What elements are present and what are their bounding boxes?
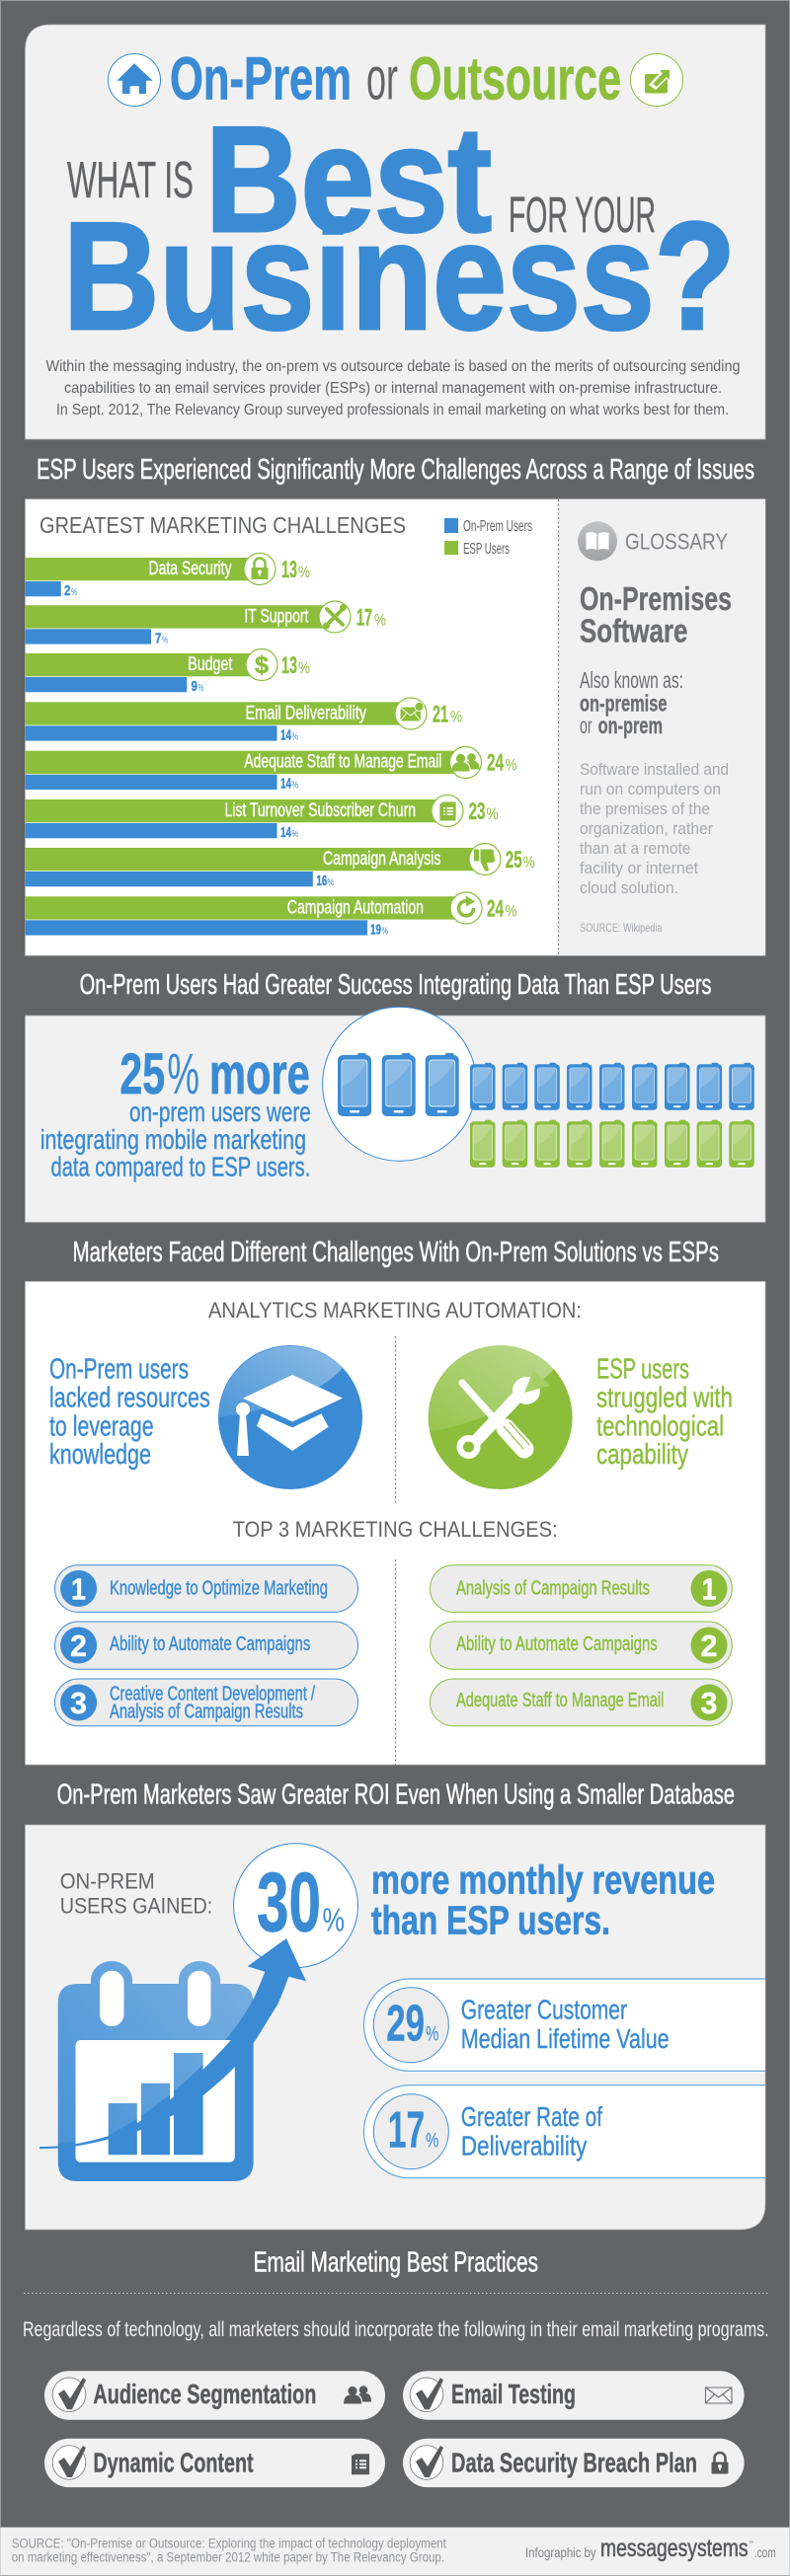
- glossary definition: cloud solution.: [580, 878, 678, 897]
- pill: email testing: [403, 2371, 745, 2420]
- credit: message systems: ™: [749, 2540, 753, 2546]
- pill: esp 2: [431, 1622, 732, 1669]
- bar row: Email Deliverability: Email Deliverability: [245, 702, 366, 723]
- subheading: top 3 challenges: TOP 3 MARKETING CHALLENGES:: [233, 1517, 558, 1542]
- bar row: Campaign Analysis: Campaign Analysis: [323, 848, 441, 870]
- stat text: 25% more: 25: [119, 1042, 165, 1106]
- intro paragraph: capabilities to an email services provider (ESPs) or internal management with on-premise infrastructure.: [64, 380, 722, 397]
- on-prem statement: On-Prem users: [49, 1354, 189, 1386]
- pill: esp 3: 3: [701, 1686, 717, 1720]
- bar row: Budget: %: [198, 683, 204, 694]
- stat: 17 percent: 17: [388, 2102, 425, 2159]
- stat: 29 percent: %: [426, 2022, 438, 2045]
- bar row: Email Deliverability: 14: [280, 727, 291, 743]
- bar row: List Turnover Subscriber Churn: %: [292, 829, 298, 840]
- footer: [0, 2528, 790, 2576]
- bar row: List Turnover Subscriber Churn: [26, 796, 498, 841]
- bar row: Data Security: [26, 553, 310, 599]
- title line: On-Prem or Outsource: [170, 45, 621, 113]
- on-prem statement: knowledge: [49, 1439, 151, 1471]
- statement: more monthly revenue: [371, 1856, 715, 1942]
- bar row: IT Support: %: [374, 610, 386, 629]
- bar row: Adequate Staff to Manage Email: %: [506, 756, 517, 775]
- esp statement: struggled with: [596, 1382, 733, 1413]
- bar row: Campaign Automation: [26, 892, 517, 938]
- stat text: 25% more: more: [209, 1042, 310, 1106]
- glossary definition: Software installed and: [580, 760, 729, 779]
- bar row: Campaign Automation: 24: [487, 895, 504, 922]
- glossary definition: facility or internet: [580, 859, 698, 877]
- also known as: on-premise: [580, 691, 668, 717]
- bar row: Campaign Automation: %: [506, 901, 517, 920]
- also known as: Also known as:: [580, 667, 683, 693]
- statement: more monthly revenue: than ESP users.: [371, 1897, 610, 1942]
- on-prem statement: lacked resources: [49, 1382, 210, 1413]
- bar row: List Turnover Subscriber Churn: 14: [280, 825, 291, 841]
- esp statement: technological: [596, 1411, 724, 1443]
- glossary term: Software: [580, 613, 687, 649]
- label: on-prem users gained: [60, 1868, 212, 1918]
- bar row: Campaign Analysis: [26, 843, 535, 889]
- bar row: Budget: 13: [281, 652, 297, 679]
- headline: What is best for your business?: [63, 96, 736, 361]
- pill: audience segmentation: [44, 2371, 385, 2420]
- small blue phones: [470, 1063, 754, 1110]
- glossary term: On-Premises: [580, 580, 732, 617]
- circle: 30 percent: 30: [257, 1856, 321, 1950]
- bar row: Campaign Analysis: 25: [506, 847, 522, 873]
- bar row: Adequate Staff to Manage Email: %: [292, 781, 298, 792]
- source note: [12, 2537, 446, 2565]
- bar row: IT Support: [26, 601, 386, 646]
- bar row: Email Deliverability: %: [292, 731, 298, 742]
- bar row: List Turnover Subscriber Churn: List Turnover Subscriber Churn: [225, 799, 416, 821]
- bar row: Adequate Staff to Manage Email: 14: [280, 777, 291, 793]
- icon: wrench and screwdriver: [427, 1343, 573, 1489]
- bar row: Campaign Analysis: 16: [316, 873, 327, 889]
- circle: 30 percent: [233, 1844, 357, 1968]
- title line: On-Prem or Outsource: On-Prem: [170, 45, 352, 113]
- credit: message systems: messagesystems: [600, 2535, 749, 2562]
- stat text: 25% more: [40, 1042, 311, 1182]
- pill: on-prem 3: Creative Content Development /: [110, 1684, 315, 1705]
- also known as: or: [580, 713, 592, 738]
- pill: dynamic content: Dynamic Content: [93, 2447, 254, 2477]
- stat: 17 percent: Deliverability: [461, 2130, 587, 2160]
- pill: on-prem 3: Analysis of Campaign Results: [110, 1701, 303, 1722]
- also known as: on-prem: [598, 713, 663, 738]
- bar row: Adequate Staff to Manage Email: [26, 746, 517, 793]
- bar row: IT Support: 17: [356, 604, 372, 631]
- esp statement: [596, 1354, 733, 1471]
- icon: house: [109, 53, 160, 107]
- stat: 29 percent: Greater Customer: [461, 1995, 627, 2025]
- stat text: 25% more: %: [167, 1042, 199, 1106]
- glossary definition: [580, 760, 729, 897]
- pill: on-prem 3: 3: [70, 1686, 87, 1720]
- stat: 17 percent: [364, 2085, 765, 2178]
- bar row: Campaign Analysis: %: [523, 853, 535, 871]
- glossary source: SOURCE: Wikipedia: [580, 921, 663, 935]
- stat text: 25% more: on-prem users were: [129, 1097, 311, 1127]
- glossary definition: organization, rather: [580, 819, 713, 838]
- bar row: Data Security: %: [71, 587, 77, 598]
- chart title: GREATEST MARKETING CHALLENGES: [40, 512, 406, 538]
- stat text: 25% more: data compared to ESP users.: [51, 1152, 310, 1182]
- stat text: 25% more: integrating mobile marketing: [40, 1124, 306, 1155]
- title line: On-Prem or Outsource: Outsource: [409, 45, 621, 113]
- pill: email testing: Email Testing: [451, 2379, 576, 2409]
- pill: esp 1: [431, 1565, 732, 1612]
- also known as: [580, 667, 683, 738]
- glossary definition: the premises of the: [580, 799, 710, 818]
- legend: ESP Users: [463, 541, 510, 558]
- legend: On-Prem Users: [463, 518, 532, 535]
- credit: message systems: Infographic by: [525, 2544, 596, 2560]
- glossary heading: GLOSSARY: [625, 529, 728, 555]
- bar row: Budget: $: [255, 651, 269, 679]
- headline: What is best for your business?: WHAT IS: [67, 152, 194, 209]
- glossary definition: run on computers on: [580, 780, 721, 798]
- bar row: Budget: 9: [192, 679, 198, 695]
- headline: What is best for your business?: Best: [205, 96, 492, 264]
- icon: graduation cap: [218, 1345, 362, 1489]
- pill: on-prem 1: Knowledge to Optimize Marketing: [110, 1577, 328, 1599]
- pill: on-prem 1: [55, 1565, 357, 1612]
- pill: on-prem 1: 1: [71, 1572, 86, 1607]
- bar row: IT Support: IT Support: [244, 605, 309, 627]
- icon: book: [578, 521, 617, 561]
- source note: SOURCE: "On-Premise or Outsource: Exploring the impact of technology deployment: [12, 2537, 446, 2551]
- stat: 29 percent: Median Lifetime Value: [461, 2023, 670, 2054]
- esp statement: ESP users: [596, 1354, 689, 1386]
- bar row: List Turnover Subscriber Churn: 23: [468, 798, 486, 825]
- stat: 17 percent: Greater Rate of: [461, 2101, 602, 2132]
- bar row: Email Deliverability: 21: [433, 701, 448, 727]
- bar row: Adequate Staff to Manage Email: 24: [487, 750, 504, 777]
- subheading: analytics marketing automation: ANALYTICS MARKETING AUTOMATION:: [208, 1298, 582, 1323]
- bar row: Data Security: %: [298, 563, 310, 581]
- pill: esp 1: 1: [701, 1572, 717, 1607]
- panel: different challenges: [26, 1281, 765, 1765]
- esp statement: capability: [596, 1439, 689, 1471]
- bar row: Email Deliverability: %: [450, 707, 462, 725]
- intro paragraph: [45, 358, 741, 418]
- pill: esp 3: Adequate Staff to Manage Email: [456, 1690, 664, 1711]
- icon: calendar with bar chart and rising arrow: [40, 1938, 306, 2181]
- bar row: Campaign Analysis: %: [328, 877, 334, 888]
- highlight circle: [323, 1007, 477, 1161]
- pill: on-prem 2: Ability to Automate Campaigns: [110, 1633, 310, 1655]
- icon: outsource arrow: [630, 53, 683, 107]
- small green phones: [470, 1120, 754, 1168]
- bar row: Email Deliverability: [26, 698, 462, 743]
- source note: on marketing effectiveness", a September 2012 white paper by The Relevancy Group.: [12, 2550, 444, 2565]
- large on-prem phones: [338, 1053, 459, 1116]
- bar row: Campaign Automation: Campaign Automation: [287, 896, 424, 918]
- panel: greatest marketing challenges: [26, 499, 765, 955]
- title line: On-Prem or Outsource: or: [366, 45, 398, 113]
- heading: best practices: Email Marketing Best Practices: [254, 2247, 538, 2279]
- credit: message systems: [525, 2535, 776, 2562]
- stat: 29 percent: [363, 1979, 765, 2071]
- pill: esp 3: [431, 1679, 732, 1726]
- bar row: Data Security: 2: [64, 583, 70, 599]
- circle: 30 percent: %: [322, 1902, 345, 1938]
- pill: data security breach plan: [403, 2439, 745, 2487]
- glossary definition: than at a remote: [580, 839, 691, 858]
- legend: [444, 518, 532, 558]
- bar row: Data Security: Data Security: [148, 558, 232, 579]
- bar row: Budget: Budget: [188, 653, 233, 675]
- on-prem statement: to leverage: [49, 1411, 154, 1443]
- pill: data security breach plan: Data Security Breach Plan: [451, 2447, 697, 2477]
- bar row: Campaign Automation: 19: [370, 922, 381, 938]
- label: on-prem users gained: ON-PREM: [60, 1868, 155, 1893]
- bar row: Budget: [26, 649, 310, 695]
- on-prem statement: [49, 1354, 210, 1471]
- bar row: IT Support: 7: [155, 631, 161, 646]
- bar row: Campaign Automation: %: [381, 926, 388, 937]
- pill: dynamic content: [44, 2439, 385, 2487]
- credit: message systems: .com: [754, 2544, 776, 2560]
- panel: title header: [26, 25, 765, 439]
- label: on-prem users gained: USERS GAINED:: [60, 1893, 212, 1918]
- bar row: IT Support: %: [162, 635, 168, 645]
- stat: 29 percent: 29: [386, 1995, 425, 2052]
- pill: on-prem 2: 2: [70, 1629, 87, 1663]
- bar row: Adequate Staff to Manage Email: Adequate Staff to Manage Email: [244, 751, 441, 773]
- sidebar: glossary: [558, 499, 765, 955]
- pill: audience segmentation: Audience Segmentation: [93, 2379, 316, 2409]
- pill: on-prem 3: [55, 1679, 357, 1726]
- stat: 17 percent: %: [426, 2130, 438, 2153]
- bar row: Budget: %: [298, 658, 310, 677]
- headline: What is best for your business?: FOR YOUR: [509, 187, 656, 243]
- panel: ROI: [26, 1825, 765, 2230]
- pill: esp 1: Analysis of Campaign Results: [456, 1577, 650, 1599]
- glossary term: [580, 580, 732, 649]
- pill: on-prem 2: [55, 1622, 357, 1669]
- pill: esp 2: 2: [701, 1629, 717, 1663]
- bar row: List Turnover Subscriber Churn: %: [486, 804, 498, 823]
- panel: mobile data integration: [26, 1007, 765, 1222]
- bar row: Data Security: 13: [281, 557, 297, 583]
- pill: esp 2: Ability to Automate Campaigns: [456, 1633, 658, 1655]
